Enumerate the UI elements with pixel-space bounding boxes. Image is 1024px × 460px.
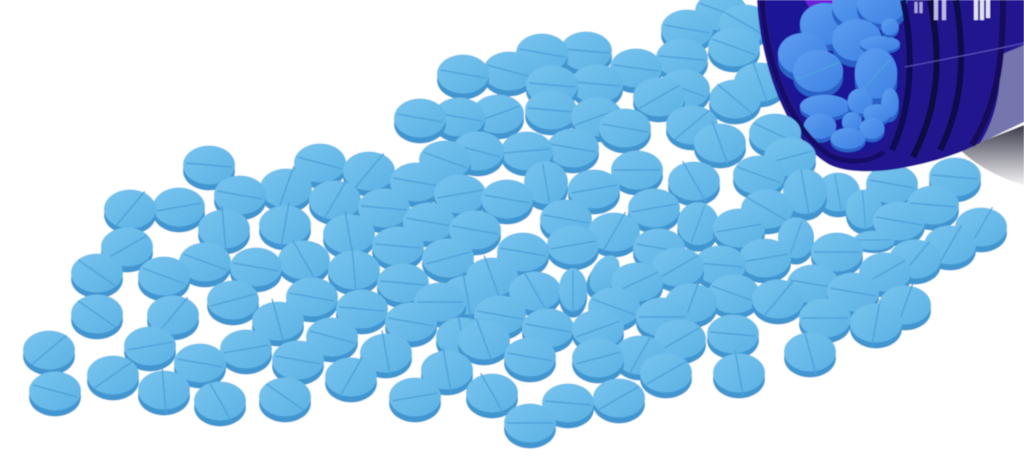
bottle body (757, 0, 1024, 171)
bottle opening (767, 0, 900, 151)
pills behind the bottle (656, 0, 1007, 284)
bottle (757, 0, 1024, 171)
grey reflection on bottle (980, 45, 1024, 143)
purple glow inside bottle (805, 0, 855, 28)
bottle shadow (960, 125, 1024, 185)
bottle bands and rim (762, 0, 1024, 161)
pills inside bottle (778, 0, 907, 152)
